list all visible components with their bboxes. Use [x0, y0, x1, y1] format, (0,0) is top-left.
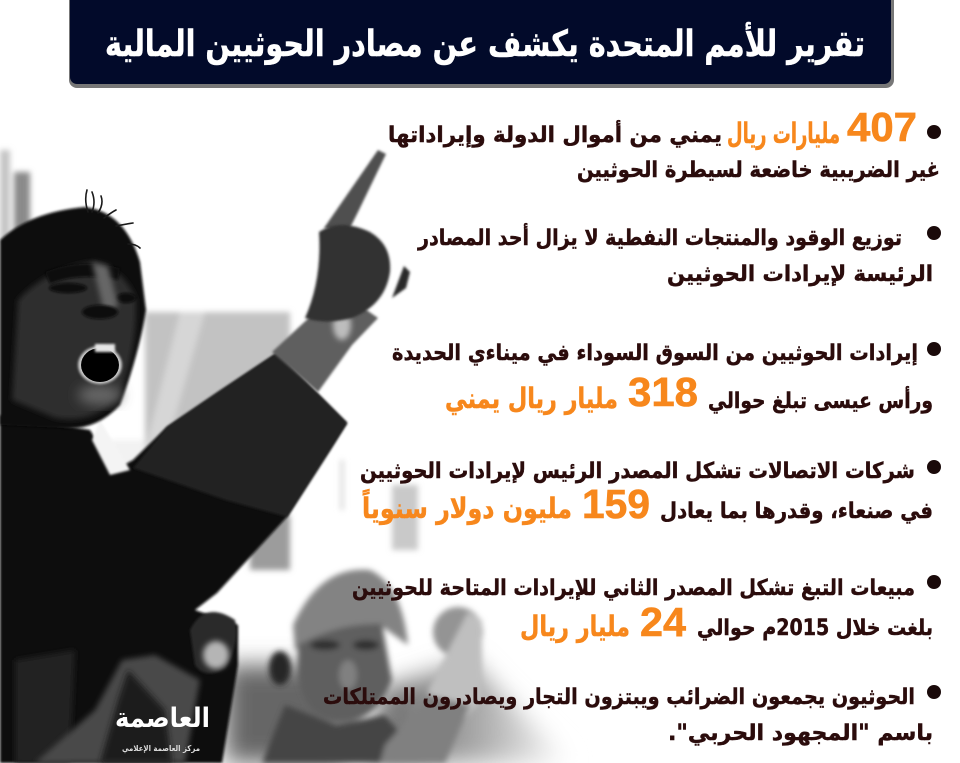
soldier: [262, 570, 483, 763]
header banner: [69, 0, 894, 88]
point 5: tobacco sales: 24: [640, 599, 686, 645]
point 4: telecoms: 159: [582, 481, 650, 527]
point 6: taxes and extortion: [323, 685, 941, 746]
logo: Al-Asima media center: العاصمة: [115, 703, 210, 734]
raised arm and fist: [272, 150, 410, 392]
point 4: telecoms: مليون دولار سنوياً: [362, 488, 572, 525]
point 5: tobacco sales: بلغت خلال 2015م حوالي: [697, 616, 933, 641]
point 2: fuel distribution: [417, 222, 941, 287]
point 4: telecoms: [360, 459, 941, 527]
logo: Al-Asima media center: [115, 703, 210, 753]
point 1: state funds: [388, 104, 941, 183]
head: [0, 190, 146, 429]
point 1: state funds: مليارات ريال: [727, 117, 840, 150]
point 3: black market revenue: 318: [628, 369, 698, 415]
point 5: tobacco sales: مليار ريال: [520, 610, 630, 643]
point 2: fuel distribution: الرئيسة لإيرادات الحوثيين: [667, 262, 933, 287]
point 4: telecoms: في صنعاء، وقدرها بما يعادل: [660, 499, 933, 524]
logo: Al-Asima media center: مركز العاصمة الإعلامي: [122, 744, 200, 753]
body: [0, 353, 347, 763]
point 6: taxes and extortion: باسم "المجهود الحربي".: [668, 721, 933, 746]
point 3: black market revenue: مليار ريال يمني: [445, 382, 618, 415]
point 3: black market revenue: [392, 341, 941, 415]
point 5: tobacco sales: [352, 575, 941, 645]
lower-right fade: [225, 660, 570, 763]
point 1: state funds: 407: [847, 104, 917, 150]
photo: protester and soldier: [0, 150, 570, 763]
point 1: state funds: يمني من أموال الدولة وإيراداتها: [388, 119, 722, 148]
